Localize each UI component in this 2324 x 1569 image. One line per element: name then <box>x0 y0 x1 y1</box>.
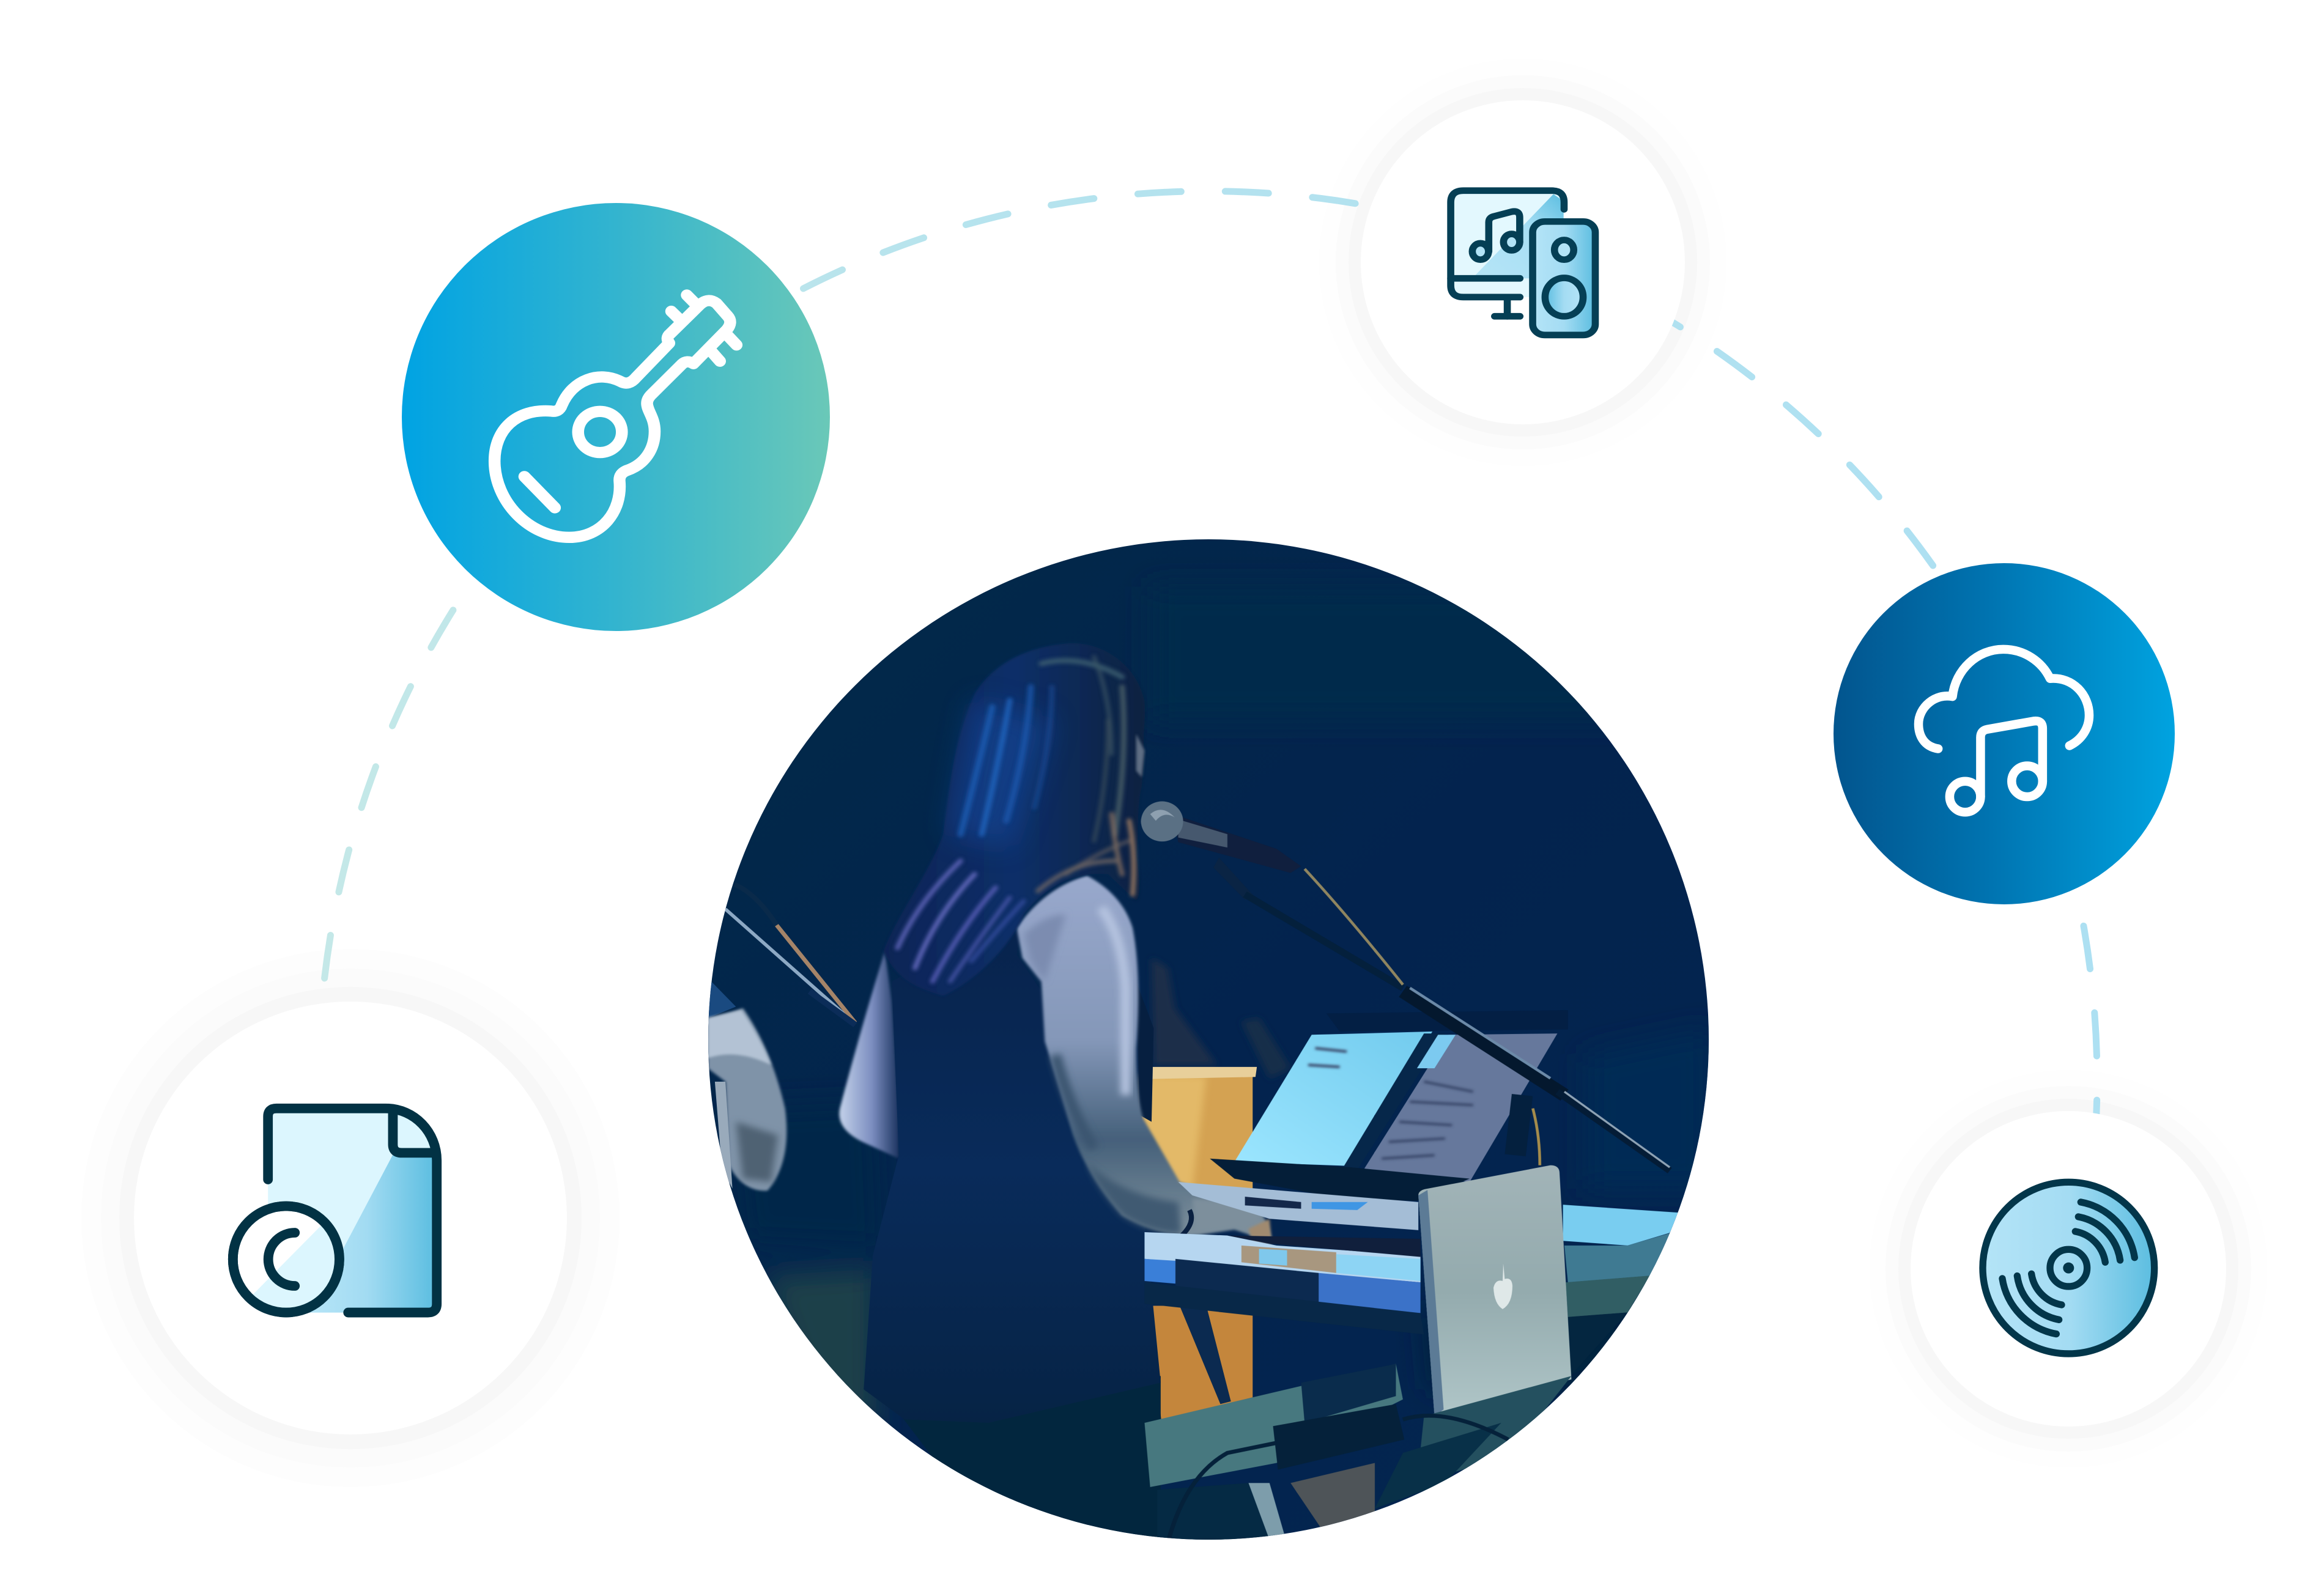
apple logo on laptop <box>1493 1264 1512 1309</box>
circle: cloud music <box>1834 563 2175 904</box>
singer hair <box>883 643 1145 996</box>
singer left arm <box>839 951 899 1159</box>
halo: copyright circle <box>81 949 620 1487</box>
dashed arc connecting the icons <box>319 191 2097 1157</box>
singer face <box>1136 734 1144 777</box>
left mic stand <box>725 907 857 1027</box>
circle: disc <box>1911 1111 2226 1427</box>
sheet music and stand <box>1210 1010 1568 1201</box>
singer right arm <box>1017 876 1271 1244</box>
icon: vinyl disc <box>1983 1182 2155 1354</box>
photo background <box>708 539 1709 1540</box>
cases and cables below keyboard <box>1144 1364 1571 1543</box>
icon: monitor and speaker <box>1451 191 1595 335</box>
icon: guitar <box>495 295 736 537</box>
circle: copyright document <box>134 1002 567 1434</box>
mic boom stand <box>1245 869 1670 1170</box>
keyboard <box>1144 1182 1424 1334</box>
keyboard right side <box>1563 1205 1680 1383</box>
icon: copyright document <box>233 1109 437 1313</box>
background floor and shadows <box>729 586 1712 1436</box>
halo: monitor circle <box>1319 59 1726 466</box>
microphone <box>1141 802 1301 899</box>
singer black top <box>864 1000 1161 1418</box>
guitarist arm <box>708 978 786 1191</box>
laptop <box>1418 1165 1571 1416</box>
circle: guitar <box>402 203 830 631</box>
circle: monitor and speaker <box>1361 100 1685 424</box>
photo: singer at keyboard <box>673 520 1774 1568</box>
background figures <box>1152 958 1290 1078</box>
podium <box>1142 1067 1257 1422</box>
halo: disc circle <box>1870 1070 2267 1467</box>
icon: cloud with music note <box>1919 649 2089 812</box>
singer legs <box>899 1376 1161 1550</box>
